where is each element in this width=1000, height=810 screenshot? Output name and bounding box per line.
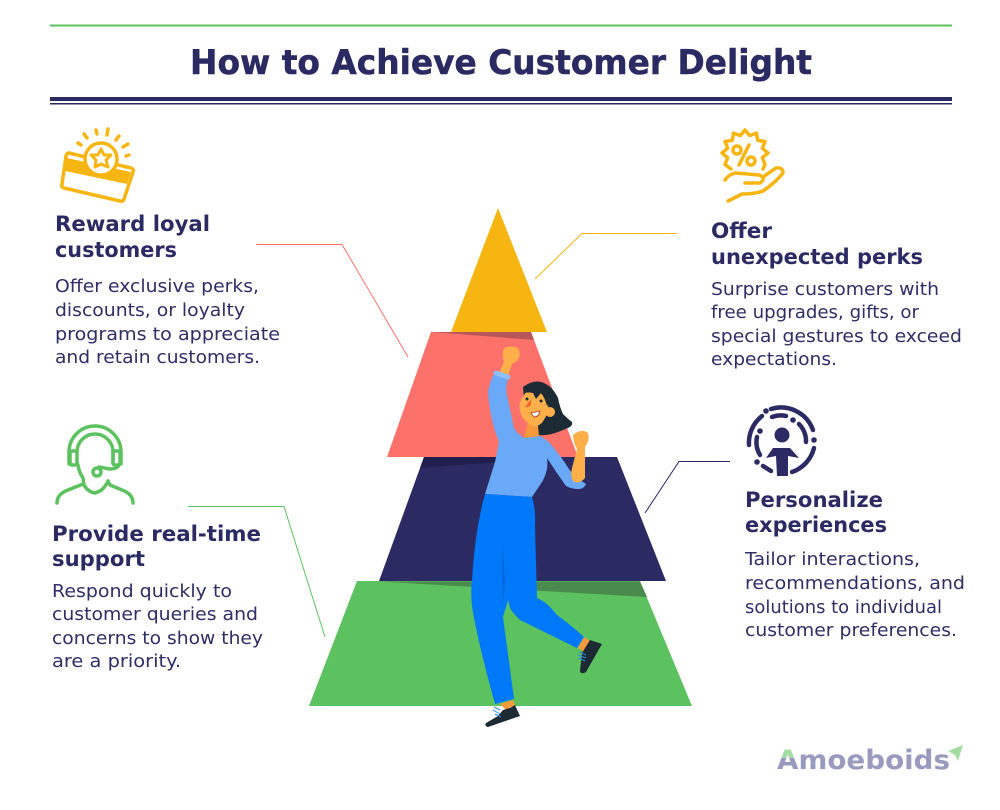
body text: are a priority. <box>52 651 181 672</box>
pyramid tier: green base <box>309 581 692 706</box>
front ankle <box>500 700 515 710</box>
body text <box>711 279 962 370</box>
heading <box>55 212 210 262</box>
panel: offer unexpected perks <box>711 130 962 370</box>
pyramid tier: coral <box>387 332 578 457</box>
body text: programs to appreciate <box>55 324 280 345</box>
raised hand <box>499 346 520 376</box>
pyramid tier: yellow apex <box>451 208 547 332</box>
body text: Respond quickly to <box>52 581 232 602</box>
heading: Offer <box>711 219 773 243</box>
body text: recommendations, and <box>745 573 965 594</box>
body text: discounts, or loyalty <box>55 300 245 321</box>
eyes <box>526 398 542 402</box>
pants inner shadow <box>502 538 505 605</box>
body text: expectations. <box>711 349 837 370</box>
body text: and retain customers. <box>55 347 260 368</box>
icon: person in rings <box>749 407 817 476</box>
mouth <box>531 411 540 417</box>
connector: navy <box>645 462 730 513</box>
body text <box>52 581 263 672</box>
connector: yellow <box>535 234 677 279</box>
icon: percent badge on hand <box>722 130 783 201</box>
heading <box>52 522 261 571</box>
fringe <box>523 384 551 406</box>
body text: Offer exclusive perks, <box>55 276 259 297</box>
front shoe <box>485 705 520 727</box>
body text: customer queries and <box>52 604 258 625</box>
body text: customer preferences. <box>745 620 957 641</box>
body text: concerns to show they <box>52 628 263 649</box>
shadow on green tier <box>379 582 647 597</box>
panel: provide real-time support <box>52 426 263 672</box>
character: jumping woman <box>471 346 602 727</box>
logo arrow <box>948 745 963 761</box>
body text <box>744 549 965 641</box>
title: How to Achieve Customer Delight <box>190 43 812 83</box>
back shoe <box>580 640 602 673</box>
header rules <box>50 24 952 104</box>
shadow on navy tier <box>420 457 500 468</box>
ear <box>545 407 555 417</box>
heading <box>745 488 887 537</box>
back ankle <box>578 637 590 652</box>
body text: Tailor interactions, <box>744 549 920 570</box>
face <box>520 392 548 426</box>
heading: customers <box>55 238 177 262</box>
laces <box>493 652 586 717</box>
body text: free upgrades, gifts, or <box>711 302 920 323</box>
connector: green <box>188 506 325 637</box>
heading: support <box>52 547 145 571</box>
heading: experiences <box>745 513 887 537</box>
pyramid chart <box>309 208 692 706</box>
neck <box>524 423 539 438</box>
heading <box>711 219 923 269</box>
icon: headset agent <box>57 426 133 503</box>
blush nose <box>525 399 531 407</box>
heading: Reward loyal <box>55 212 210 236</box>
heading: unexpected perks <box>711 245 923 269</box>
body text: special gestures to exceed <box>711 326 962 347</box>
connector: coral <box>256 244 408 357</box>
heading: Personalize <box>745 488 883 512</box>
body text <box>55 276 280 368</box>
body text: solutions to individual <box>745 597 942 618</box>
icon: reward card <box>62 129 133 201</box>
heading: Provide real-time <box>52 522 261 546</box>
sweater <box>485 372 586 497</box>
sleeve cuff <box>496 373 508 377</box>
body text: Surprise customers with <box>711 279 939 300</box>
pyramid tier: navy <box>379 457 666 581</box>
pants <box>471 494 584 704</box>
forearm and fist <box>571 431 589 482</box>
shadow on coral tier <box>431 332 534 340</box>
panel: reward loyal customers <box>55 129 280 368</box>
logo: Amoeboids: Amoeboids <box>777 745 950 776</box>
hair <box>523 382 572 435</box>
panel: personalize experiences <box>744 407 965 641</box>
